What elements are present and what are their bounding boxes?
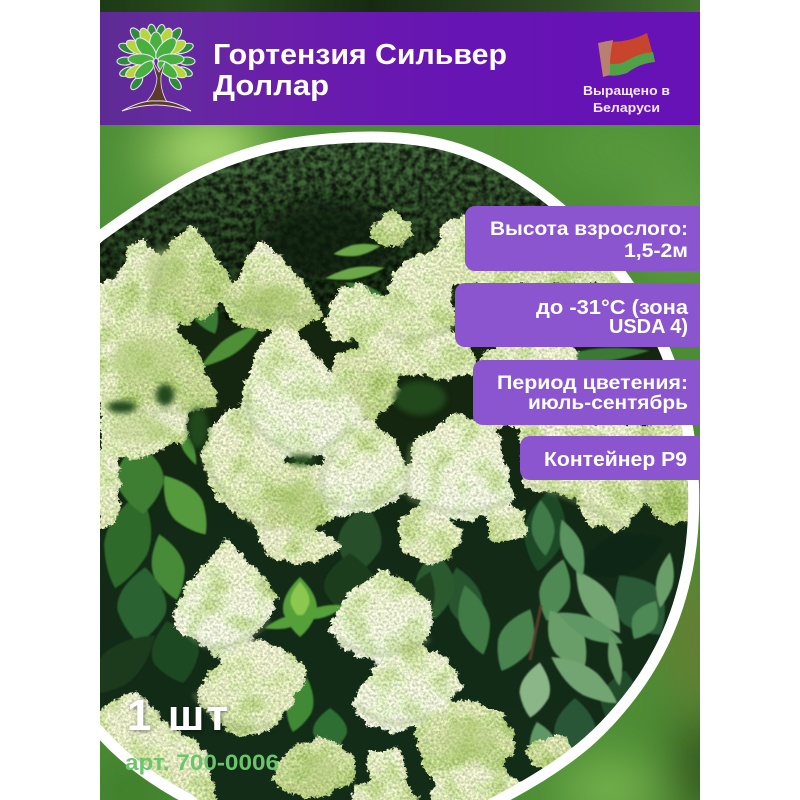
title: Доллар: [213, 70, 329, 102]
badge: flowering period: [473, 360, 723, 425]
flag caption: Беларуси: [593, 100, 660, 115]
badge: height: [465, 206, 725, 271]
flower heads: [104, 217, 686, 800]
badge: container: Контейнер Р9: [544, 449, 687, 471]
badge: height: 1,5-2м: [624, 241, 688, 262]
flag caption: Выращено в: [583, 83, 670, 98]
badge: flowering period: Период цветения:: [497, 373, 688, 394]
dark hedge: [100, 142, 688, 800]
badge: hardiness: до -31°C (зона: [536, 297, 689, 319]
badge: hardiness: USDA 4): [609, 316, 688, 338]
badge: height: Высота взрослого:: [490, 219, 688, 240]
blurred green background: [100, 125, 700, 800]
greenish shading on heads: [110, 248, 496, 784]
photo: hydrangea bush: [100, 142, 688, 800]
title: Гортензия Сильвер: [213, 39, 507, 71]
top photo strip: [100, 0, 700, 12]
shadow lines between heads: [105, 262, 650, 728]
badge: container: [520, 436, 720, 480]
logo: tree: [117, 24, 195, 111]
badge: flowering period: июль-сентябрь: [528, 393, 688, 414]
quantity: 1 шт: [127, 691, 228, 740]
article number: арт. 700-0006: [125, 750, 279, 775]
white ring: [60, 137, 694, 800]
title: [213, 39, 507, 102]
badge: hardiness: [455, 283, 725, 347]
panel: product card: [100, 0, 700, 800]
foliage: [100, 243, 675, 748]
flag caption: [584, 86, 670, 114]
dark pockets between heads: [108, 381, 446, 465]
header band: [100, 12, 700, 125]
icon: flag of Belarus: [598, 33, 655, 77]
